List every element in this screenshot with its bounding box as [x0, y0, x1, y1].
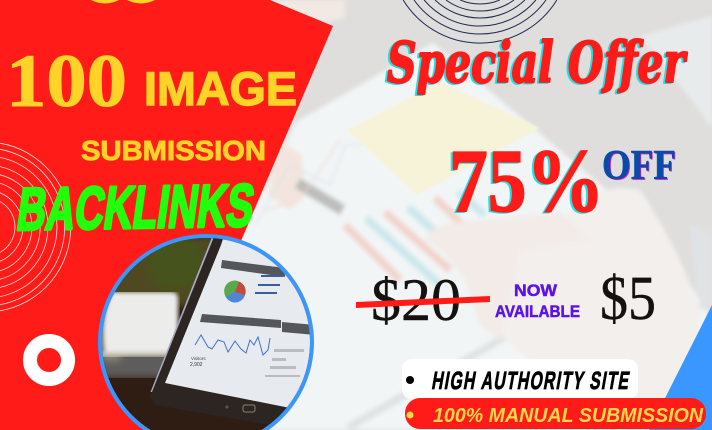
circular tablet photo — [98, 234, 315, 430]
clipped yellow numerals at top edge — [91, 0, 155, 4]
old price: $20 struck through: $20 — [371, 267, 461, 333]
red diagonal panel — [0, 0, 333, 430]
label: NOW AVAILABLE: NOW — [514, 282, 557, 300]
feature pill: High Authority Site — [402, 359, 638, 399]
title: BACKLINKS: BACKLINKS — [13, 171, 259, 243]
title: 100 IMAGE: IMAGE — [144, 62, 297, 115]
white donut — [30, 341, 68, 379]
decorative white concentric arcs — [0, 143, 71, 311]
circular tablet photo: Visitors — [191, 356, 206, 361]
circular tablet photo: 2,902 — [190, 362, 203, 368]
discount: 75%: 75% — [447, 133, 602, 232]
discount: 75%: 75% — [449, 132, 604, 231]
feature pill: 100% Manual Submission — [405, 398, 706, 429]
discount: OFF: OFF — [603, 144, 677, 190]
title: 100 IMAGE — [6, 40, 297, 123]
label: NOW AVAILABLE: AVAILABLE — [495, 303, 580, 321]
discount: OFF: OFF — [602, 143, 676, 189]
new price: $5: $5 — [600, 265, 656, 333]
old price: $20 struck through — [356, 267, 490, 333]
label: NOW AVAILABLE — [495, 282, 580, 321]
decorative dark concentric arcs — [403, 0, 557, 43]
feature pill: 100% Manual Submission: 100% MANUAL SUBMISSION — [433, 405, 704, 427]
title: SUBMISSION: SUBMISSION — [81, 135, 266, 166]
blue corner triangle — [649, 305, 712, 430]
title: 100 IMAGE: 100 — [6, 40, 127, 123]
